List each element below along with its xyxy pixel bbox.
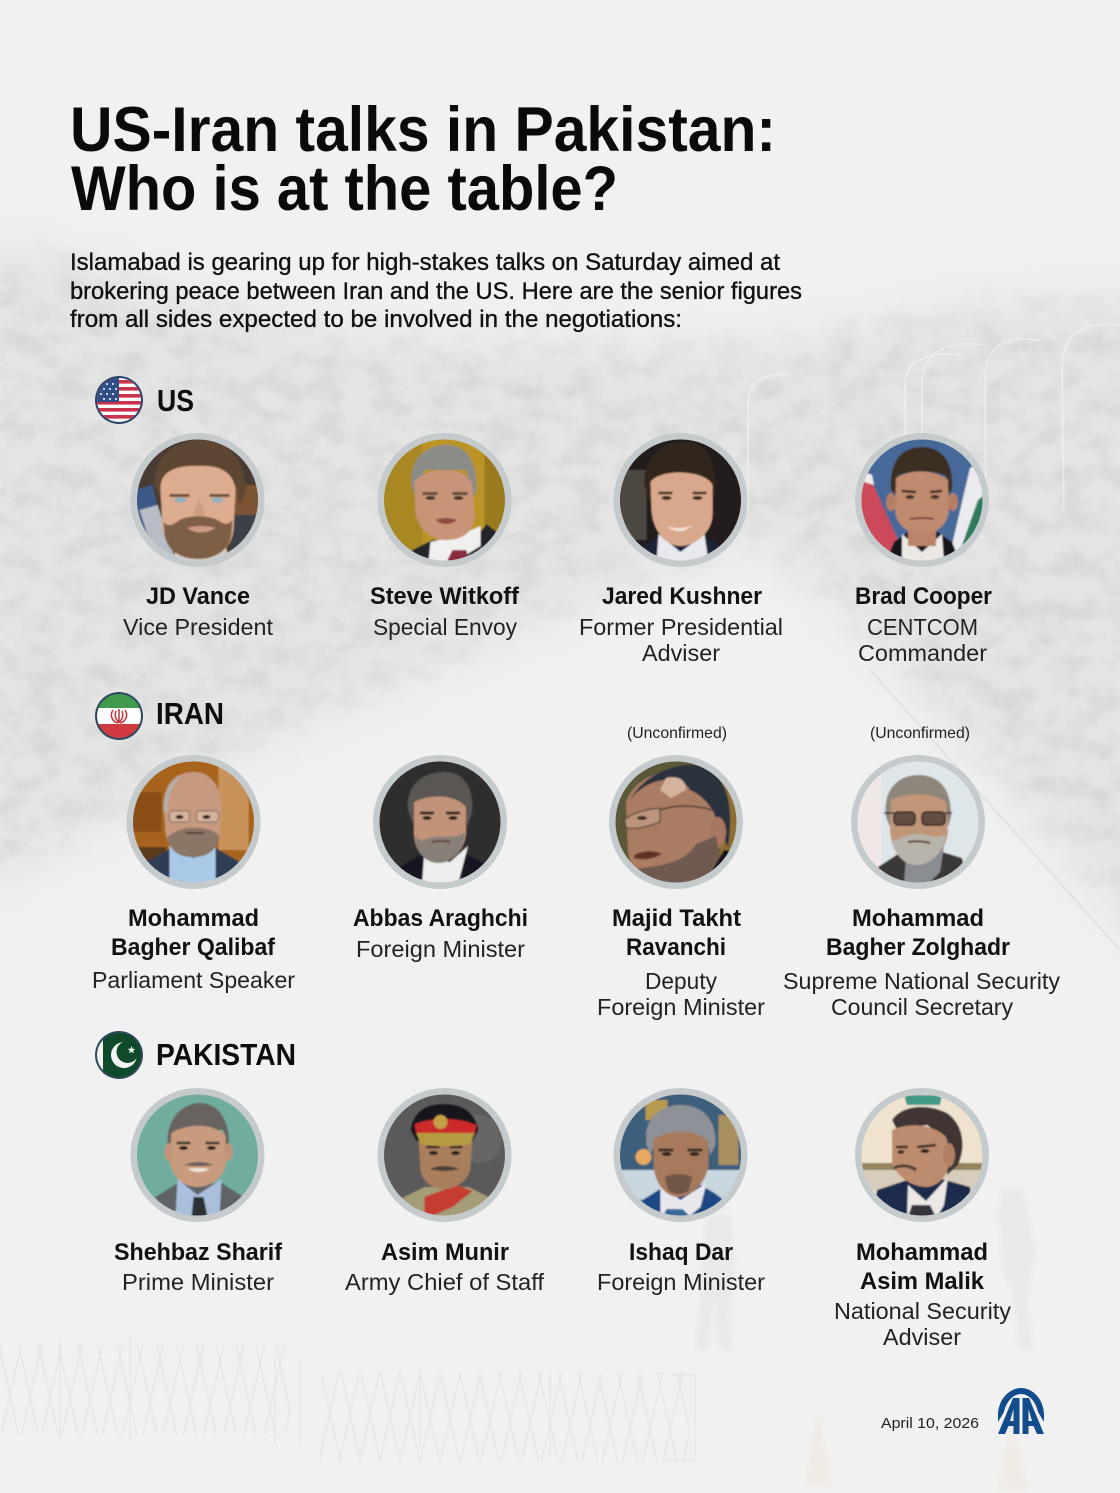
intro text: Islamabad is gearing up for high-stakes talks on Saturday aimed at <box>70 249 780 276</box>
intro text <box>70 249 802 333</box>
role: CENTCOM <box>867 614 978 640</box>
role: Former Presidential <box>579 614 783 640</box>
card: Jared Kushner <box>579 433 783 666</box>
name: Bagher Zolghadr <box>826 934 1010 961</box>
portrait: Mohammad Bagher Qalibaf <box>126 755 260 889</box>
panel: Pakistan delegation <box>95 1031 1011 1350</box>
icon: Anadolu Agency logo <box>998 1388 1044 1434</box>
role: National Security <box>834 1298 1011 1324</box>
card: Mohammad Bagher Zolghadr <box>783 725 1060 1020</box>
role: Adviser <box>642 640 720 666</box>
card: Asim Munir <box>345 1088 544 1295</box>
name <box>612 905 741 961</box>
portrait: Jared Kushner <box>614 433 748 567</box>
name: Mohammad <box>856 1239 988 1266</box>
card: Brad Cooper <box>855 433 992 666</box>
role: Special Envoy <box>373 614 517 640</box>
portrait: Abbas Araghchi <box>373 755 507 889</box>
role <box>579 614 783 666</box>
name <box>856 1239 988 1295</box>
card: Steve Witkoff <box>370 433 520 640</box>
intro text: brokering peace between Iran and the US. Here are the senior figures <box>70 278 802 305</box>
name: Abbas Araghchi <box>353 905 528 932</box>
role: Army Chief of Staff <box>345 1269 544 1295</box>
card: Ishaq Dar <box>597 1088 765 1295</box>
name: Brad Cooper <box>855 583 992 610</box>
name: Asim Malik <box>860 1268 985 1295</box>
role <box>783 968 1060 1020</box>
card: Mohammad Bagher Qalibaf <box>92 755 295 993</box>
portrait: Asim Munir <box>378 1088 512 1222</box>
icon: US flag <box>95 376 143 424</box>
heading: US: US <box>157 383 194 418</box>
name: Mohammad <box>852 905 984 932</box>
portrait: Ishaq Dar <box>614 1088 748 1222</box>
title: US-Iran talks in Pakistan: <box>70 95 776 165</box>
name <box>826 905 1010 961</box>
portrait: JD Vance <box>130 433 264 567</box>
name: Ravanchi <box>626 934 726 961</box>
card: Abbas Araghchi <box>353 755 528 962</box>
date: April 10, 2026 <box>881 1415 979 1432</box>
name: Bagher Qalibaf <box>111 934 276 961</box>
status: unconfirmed: (Unconfirmed) <box>627 725 727 742</box>
role: Vice President <box>123 614 273 640</box>
card: JD Vance <box>123 433 273 640</box>
title: Who is at the table? <box>71 154 618 224</box>
name: Mohammad <box>128 905 259 932</box>
portrait: Mohammad Asim Malik <box>855 1088 989 1222</box>
portrait: Shehbaz Sharif <box>130 1088 264 1222</box>
name: Steve Witkoff <box>370 583 520 610</box>
title <box>70 95 776 224</box>
role: Parliament Speaker <box>92 967 295 993</box>
panel: US delegation <box>95 376 992 666</box>
panel: Iran delegation <box>92 692 1060 1020</box>
portrait: Majid Takht Ravanchi <box>609 755 743 889</box>
role: Commander <box>858 640 987 666</box>
icon: Pakistan flag <box>95 1031 143 1079</box>
name: Shehbaz Sharif <box>114 1239 283 1266</box>
role <box>858 614 987 666</box>
status: unconfirmed: (Unconfirmed) <box>870 725 970 742</box>
name: Jared Kushner <box>602 583 762 610</box>
heading: IRAN: IRAN <box>156 696 224 731</box>
portrait: Brad Cooper <box>855 433 989 567</box>
card: Shehbaz Sharif <box>114 1088 283 1295</box>
name: Ishaq Dar <box>629 1239 733 1266</box>
card: Mohammad Asim Malik <box>834 1088 1011 1350</box>
name: Majid Takht <box>612 905 741 932</box>
role: Deputy <box>645 968 717 994</box>
role <box>834 1298 1011 1350</box>
portrait: Steve Witkoff <box>378 433 512 567</box>
role: Foreign Minister <box>597 1269 765 1295</box>
role: Foreign Minister <box>356 936 525 962</box>
portrait: Mohammad Bagher Zolghadr <box>851 755 985 889</box>
role <box>597 968 765 1020</box>
name: Asim Munir <box>381 1239 509 1266</box>
intro text: from all sides expected to be involved in the negotiations: <box>70 306 682 333</box>
role: Supreme National Security <box>783 968 1060 994</box>
role: Foreign Minister <box>597 994 765 1020</box>
heading: PAKISTAN: PAKISTAN <box>156 1037 296 1072</box>
card: Majid Takht Ravanchi <box>597 725 765 1020</box>
name: JD Vance <box>146 583 250 610</box>
name <box>111 905 276 961</box>
icon: Iran flag <box>95 692 143 740</box>
role: Council Secretary <box>831 994 1013 1020</box>
role: Adviser <box>883 1324 961 1350</box>
role: Prime Minister <box>122 1269 274 1295</box>
